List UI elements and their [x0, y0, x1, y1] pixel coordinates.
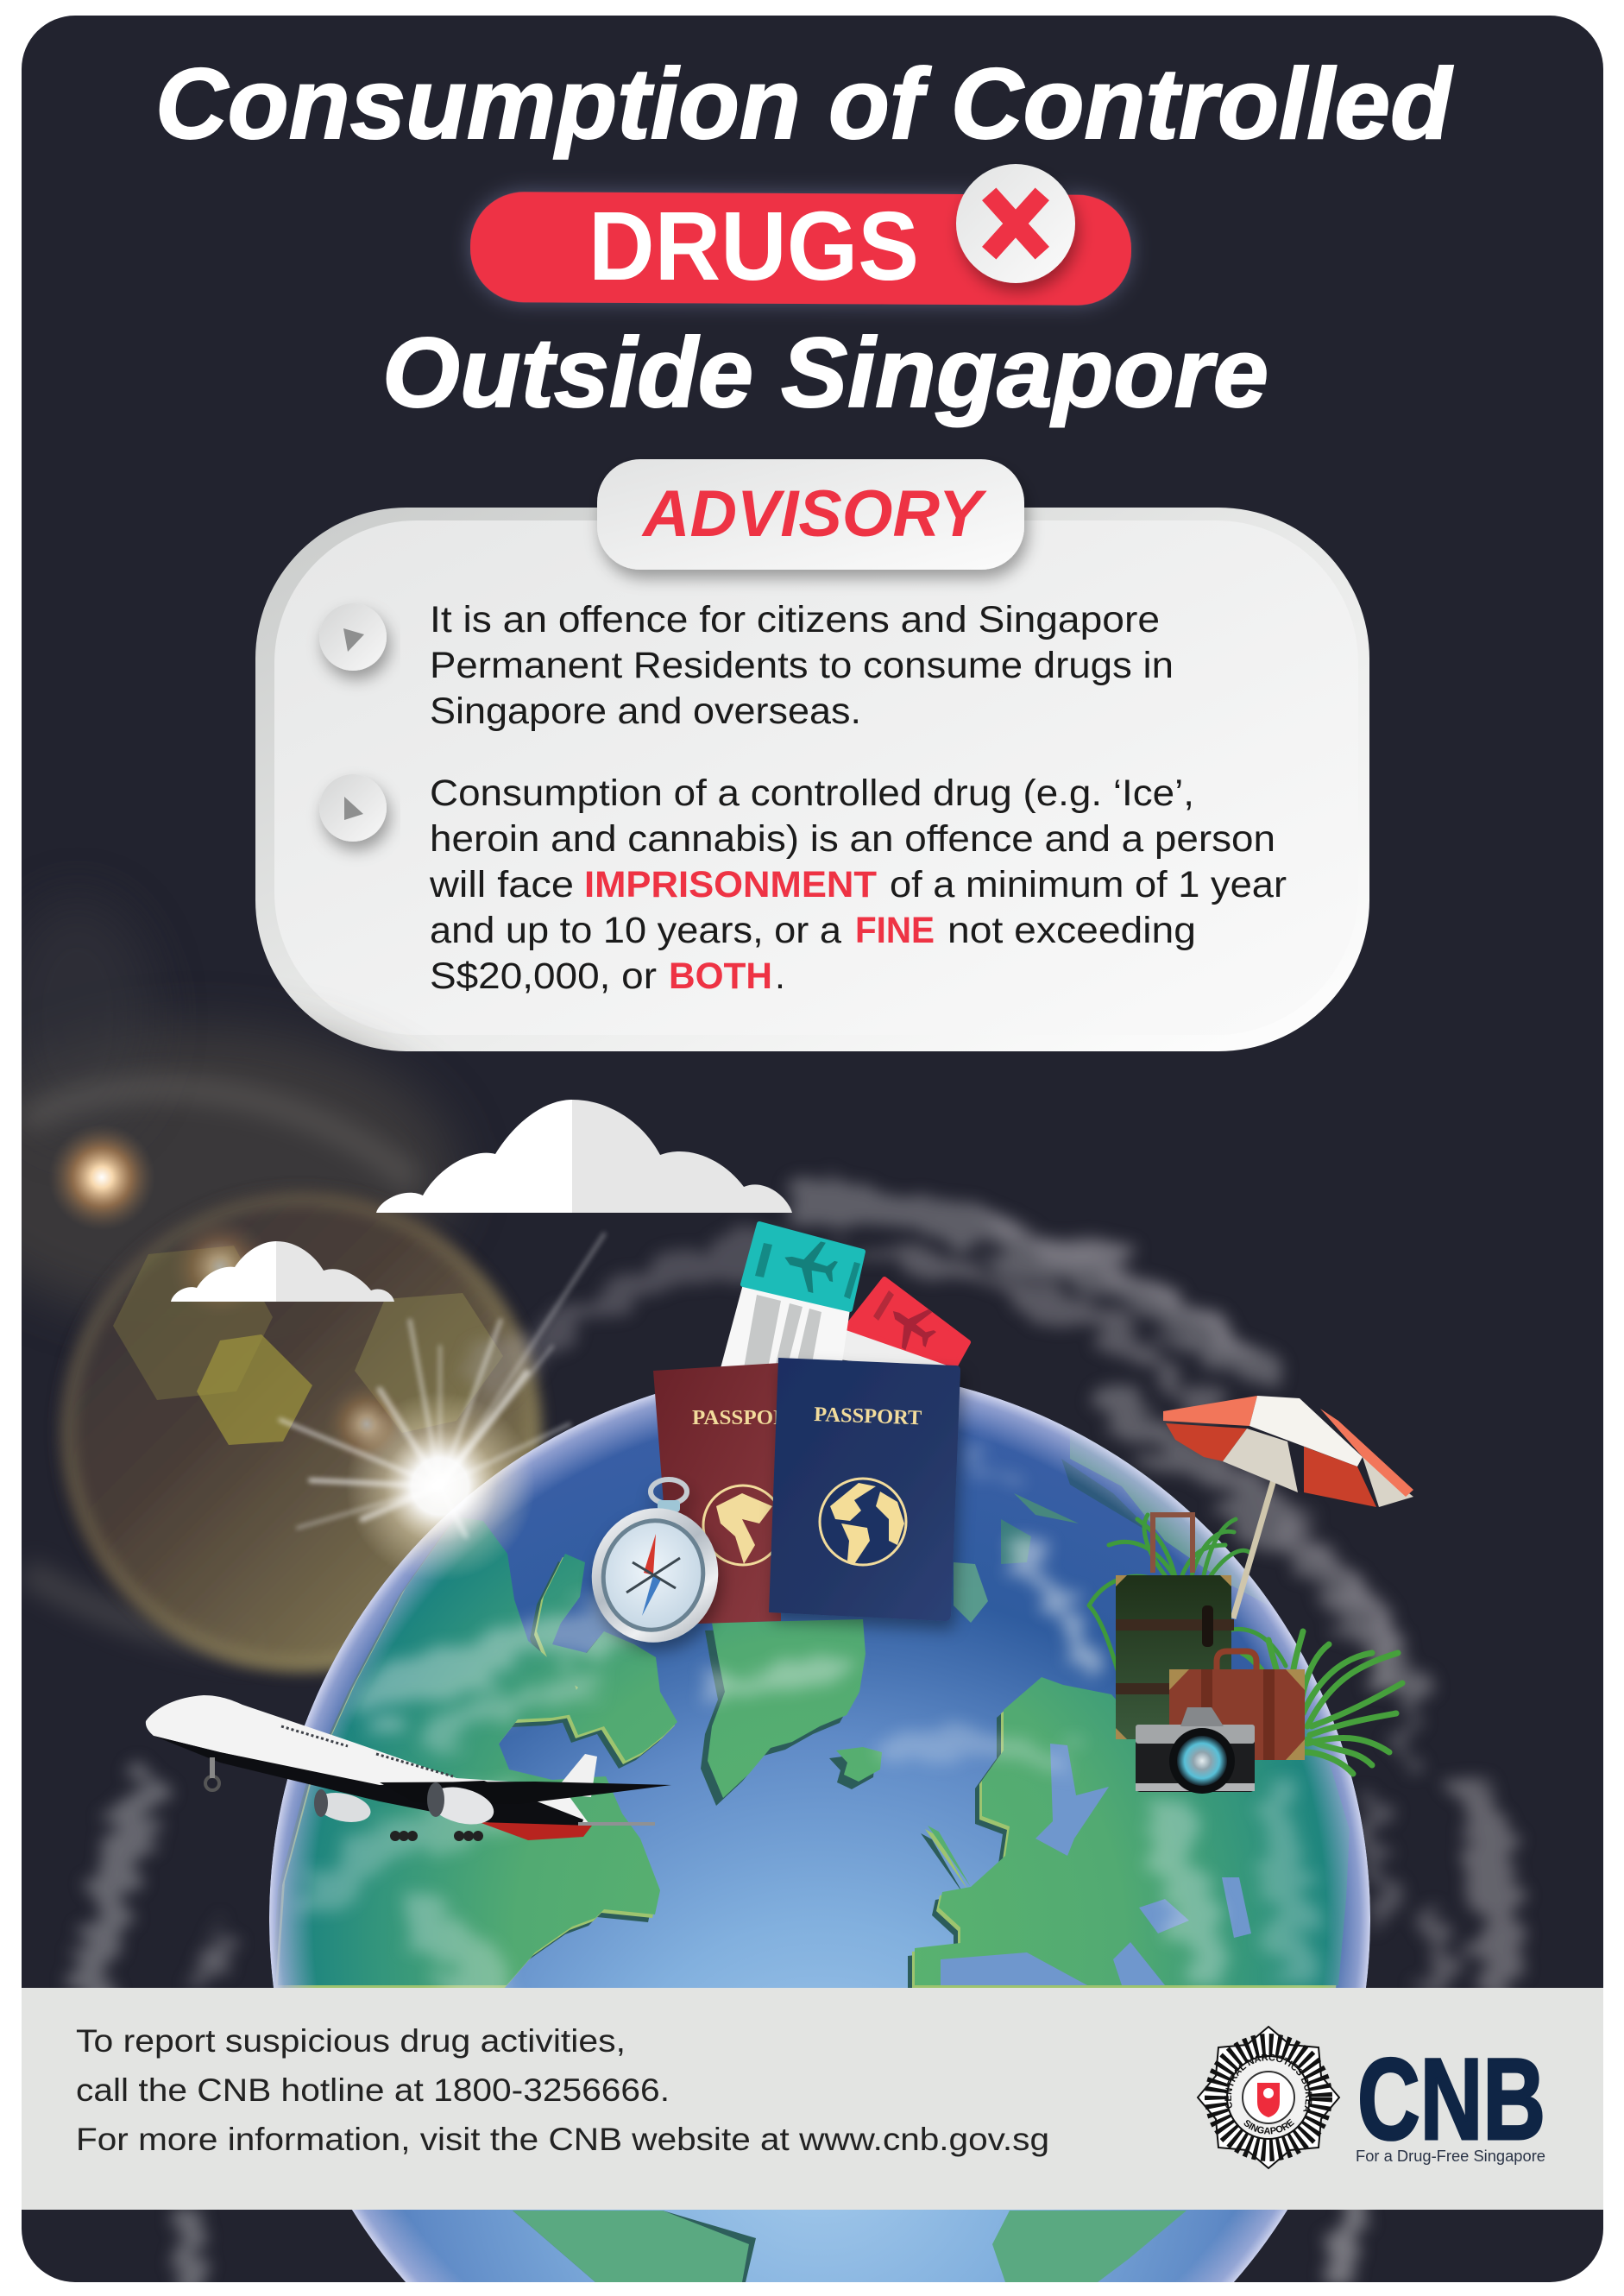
wispy clouds around the globe [91, 1195, 1501, 2282]
red pill [470, 192, 1131, 306]
small cloud [171, 1241, 394, 1302]
tail fin [552, 1754, 597, 1797]
inland seas [941, 1744, 1251, 1985]
CNB tagline: For a Drug-Free Singapore [1356, 2148, 1545, 2165]
paragraph two: will face [429, 864, 574, 905]
title line: Consumption of Controlled: Consumption of Controlled [155, 47, 1453, 160]
red passport label [692, 1407, 803, 1565]
big cloud [376, 1100, 792, 1213]
footer contact text: For more information, visit the CNB website at www.cnb.gov.sg [76, 2121, 1049, 2157]
icon: airplane [146, 1695, 671, 1841]
icon: bullet one [319, 603, 387, 671]
lens flare background [0, 898, 542, 1673]
rim glow [269, 1369, 1370, 2282]
advisory tab [597, 459, 1024, 570]
paragraph two: and up to 10 years, or a [430, 910, 841, 951]
rear stabilizer [578, 1822, 655, 1826]
paragraph two: not exceeding [947, 910, 1196, 951]
red passport label: PASSPORT [692, 1407, 803, 1429]
fuselage [146, 1695, 589, 1823]
paragraph two: of a minimum of 1 year [890, 864, 1287, 905]
icon: green suitcase [1116, 1515, 1234, 1739]
belly stripe [154, 1736, 583, 1830]
lower globe land below footer [513, 2211, 1187, 2282]
paragraph two [429, 773, 1287, 997]
icon: plants [1089, 1515, 1402, 1774]
passport globe emblem [820, 1479, 906, 1565]
land edge [275, 1520, 1347, 1989]
upper islands [954, 1424, 1268, 1623]
umbrella underside [1166, 1423, 1413, 1507]
paragraph two: S$20,000, or [430, 956, 657, 997]
paragraph one: Singapore and overseas. [430, 691, 861, 732]
icon: teal boarding ticket [721, 1224, 863, 1368]
paragraph one [430, 599, 1174, 732]
badge lettering: CENTRAL NARCOTICS BUREAU [1224, 2054, 1312, 2111]
red belly [479, 1822, 592, 1840]
landing gear [205, 1757, 483, 1841]
icon: camera [1136, 1707, 1255, 1794]
icon: blue passport [769, 1358, 960, 1621]
continents [271, 1424, 1350, 1993]
panel body [255, 508, 1369, 1051]
sun burst [280, 1234, 604, 1581]
ocean [269, 1369, 1370, 2282]
land surface [278, 1517, 1350, 1985]
footer contact text: To report suspicious drug activities, [76, 2022, 626, 2059]
DRUGS label: DRUGS [589, 192, 919, 300]
icon: bullet two [319, 774, 387, 842]
footer contact text: call the CNB hotline at 1800-3256666. [76, 2072, 670, 2108]
icon: beach umbrella [1163, 1396, 1413, 1618]
advisory heading: ADVISORY [641, 477, 987, 551]
paragraph two: FINE [855, 910, 935, 951]
engines [313, 1781, 498, 1831]
paragraph one: It is an offence for citizens and Singapore [430, 599, 1160, 640]
paragraph two: . [775, 956, 785, 997]
paragraph two: BOTH [669, 956, 772, 997]
panel: advisory [255, 459, 1369, 1051]
badge lettering [211, 1100, 1348, 2134]
icon: red passport [653, 1363, 803, 1624]
paragraph two: IMPRISONMENT [584, 864, 877, 905]
footer contact text [76, 2022, 1049, 2157]
title line: Outside Singapore: Outside Singapore [382, 319, 1268, 428]
CNB badge [211, 1100, 1374, 2170]
cloud streaks on globe [319, 1467, 1294, 1985]
DRUGS pill with cross button [470, 164, 1131, 306]
icon: brown case [1169, 1651, 1305, 1760]
CNB wordmark: CNB [1357, 2035, 1545, 2164]
paragraph two: heroin and cannabis) is an offence and a person [430, 818, 1275, 860]
icon: compass [579, 1479, 731, 1654]
land shadow [271, 1524, 1343, 1993]
icon: red boarding ticket [839, 1279, 968, 1372]
umbrella top [1163, 1396, 1413, 1497]
window line [281, 1726, 453, 1776]
badge lettering: SINGAPORE [1244, 2118, 1294, 2134]
badge crest [1257, 2083, 1280, 2117]
wing [380, 1782, 671, 1804]
paragraph two: Consumption of a controlled drug (e.g. ‘Ice’, [430, 773, 1194, 814]
blue passport label: PASSPORT [814, 1403, 922, 1429]
icon: cross button [956, 164, 1075, 283]
paragraph one: Permanent Residents to consume drugs in [430, 645, 1174, 686]
globe [269, 1369, 1370, 2282]
